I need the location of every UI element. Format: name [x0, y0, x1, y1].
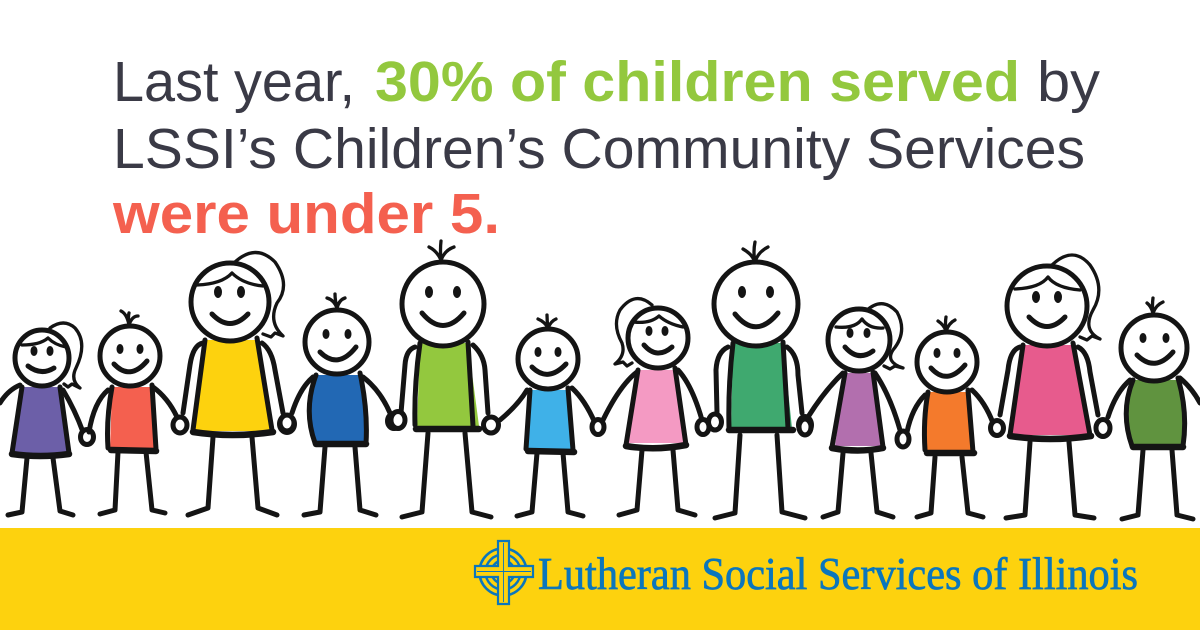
figure 11: woman in magenta dress — [1000, 255, 1110, 518]
figure 2: boy in red shirt — [89, 311, 187, 514]
heading: LSSI’s Children’s Community Services — [113, 117, 1085, 181]
logo: organization name: Lutheran Social Services of Illinois — [538, 548, 1138, 599]
figure 4: boy in blue shirt — [280, 294, 400, 515]
figure 3: woman in yellow dress — [183, 252, 294, 515]
figure 9: girl in violet dress — [799, 304, 909, 517]
heading — [112, 50, 1101, 246]
figure 6: boy in sky-blue shirt — [500, 315, 604, 516]
yellow footer band — [0, 528, 1200, 630]
figure 7: girl in pink dress — [603, 299, 722, 515]
figure 5: boy in lime shirt — [391, 241, 498, 517]
figure 10: boy in orange shirt — [907, 317, 1004, 517]
figure 8: boy in emerald shirt — [714, 242, 812, 518]
heading: Last year, — [113, 50, 355, 114]
heading: by — [1037, 50, 1101, 114]
heading: were under 5. — [112, 182, 500, 246]
logo: cross and rings icon — [475, 541, 533, 604]
figure 1: girl in purple dress — [0, 323, 94, 515]
heading: 30% of children served — [375, 50, 1020, 114]
figure 12: boy in olive shirt — [1108, 298, 1200, 519]
